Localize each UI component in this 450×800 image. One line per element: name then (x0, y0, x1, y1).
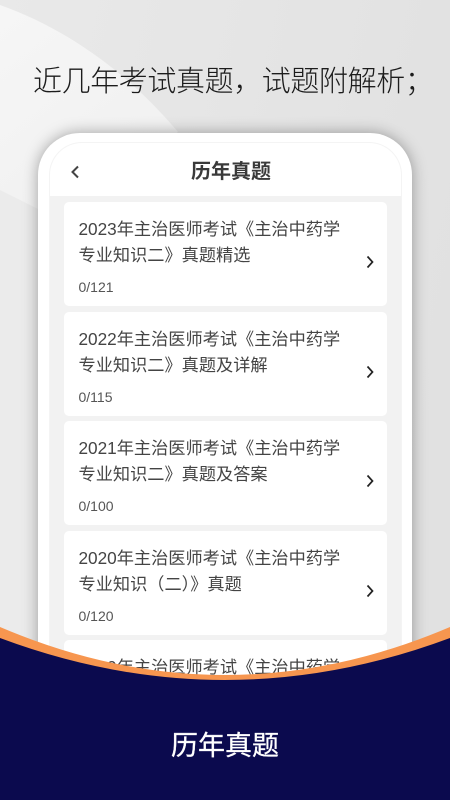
title: 近几年考试真题，试题附解析； (33, 66, 433, 98)
card: 2020: 2020年主治医师考试《主治中药学 (78, 548, 340, 568)
card: 2023: 2023年主治医师考试《主治中药学 (78, 219, 340, 239)
phone mockup (38, 133, 412, 753)
card: 2021 (64, 421, 387, 525)
banner label: 历年真题 (171, 731, 279, 761)
card: 2021: 2021年主治医师考试《主治中药学 (78, 438, 340, 458)
card: 2021: 专业知识二》真题及答案 (78, 464, 268, 484)
bottom curved banner (0, 627, 450, 800)
screen heading: 历年真题 (191, 161, 271, 183)
card: 2022: 2022年主治医师考试《主治中药学 (78, 329, 340, 349)
card: 2023 (64, 202, 387, 306)
card: 2020: 0/120 (78, 608, 114, 624)
card: 2022: 专业知识二》真题及详解 (78, 355, 268, 375)
card: 2021: 0/100 (78, 498, 114, 514)
card: 2022: 0/115 (78, 389, 112, 405)
card: 2023: 专业知识二》真题精选 (78, 245, 250, 265)
icon: back arrow (71, 166, 79, 178)
card: 2022 (64, 312, 387, 416)
card: 2020: 专业知识（二）》真题 (78, 574, 242, 594)
card: 2019 partially hidden: 2019年主治医师考试《主治中药学 (78, 657, 340, 677)
screen header (50, 143, 401, 196)
card: 2023: 0/121 (78, 279, 114, 295)
phone screen (50, 143, 401, 753)
card: 2019 partially hidden (64, 640, 387, 744)
card: 2020 (64, 531, 387, 635)
